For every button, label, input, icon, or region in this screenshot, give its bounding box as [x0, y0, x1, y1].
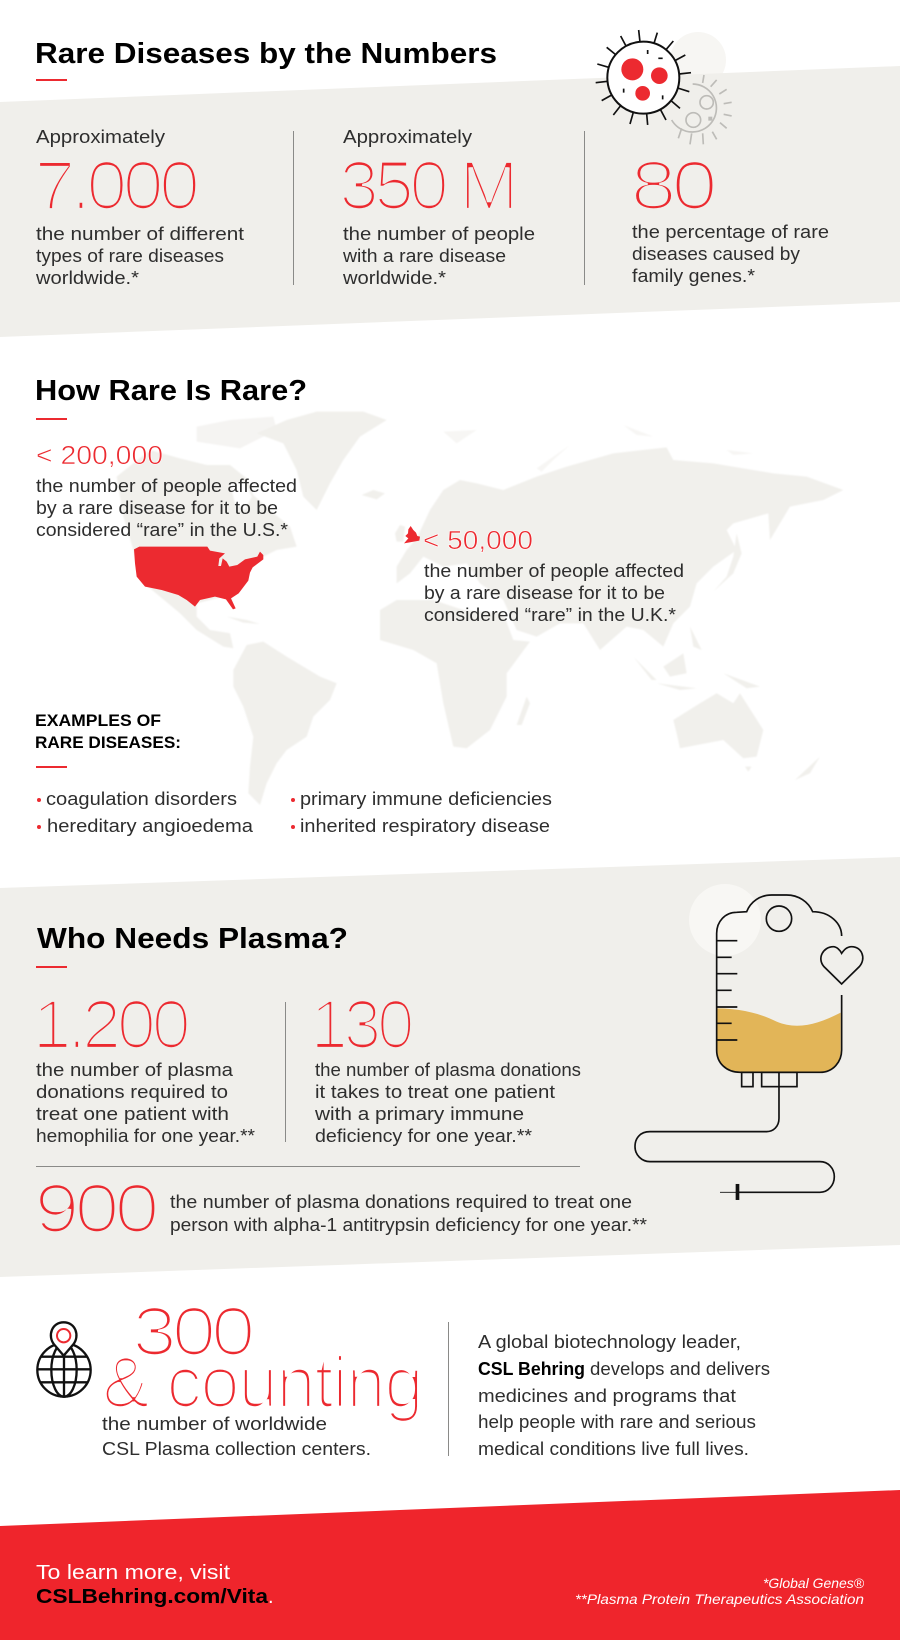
stat: 7,000: the number of different: [36, 223, 244, 244]
panel: collection centers and CSL Behring: [37, 1293, 770, 1459]
text: CSL Behring description: [478, 1331, 770, 1459]
stat: 80: [630, 147, 829, 286]
text: collection centers: [102, 1413, 371, 1459]
text: CSL Behring description: A global biotechnology leader,: [478, 1331, 741, 1352]
list: rare disease examples: [37, 788, 552, 836]
stat: 1,200: the number of plasma: [36, 1059, 234, 1080]
stat: 300 and counting: & counting: [102, 1344, 422, 1423]
heading: Who Needs Plasma?: Who Needs Plasma?: [37, 923, 348, 955]
stat: 900: person with alpha-1 antitrypsin deficiency for one year.**: [170, 1214, 647, 1235]
panel: footer call to action: [0, 1490, 900, 1640]
text: CSL Behring description: CSL Behring: [478, 1358, 585, 1379]
stat: 900: 900: [34, 1170, 157, 1247]
text: sources: *Global Genes®: [763, 1575, 865, 1591]
text: collection centers: the number of worldwide: [102, 1413, 327, 1434]
subheading: examples of rare diseases: [35, 711, 181, 752]
stat: 900: [34, 1170, 647, 1247]
stat: 80: the percentage of rare: [632, 221, 829, 242]
icon: plasma bag with tube: [635, 884, 863, 1200]
callout: UK threshold: < 50,000: [423, 525, 533, 555]
text: CSL Behring description: develops and delivers: [590, 1358, 770, 1379]
grey virus: [672, 75, 732, 144]
heading accent dash: [36, 418, 67, 420]
text: CSL Behring description: help people with rare and serious: [478, 1411, 756, 1432]
stat: 80: diseases caused by: [632, 243, 801, 264]
text: to learn more: .: [268, 1586, 274, 1608]
subheading accent dash: [36, 766, 67, 768]
europe, asia, africa, oceania: [380, 425, 843, 780]
heading accent dash: [36, 966, 67, 968]
stat: 7,000: worldwide.*: [35, 267, 139, 288]
icon: virus cells: [596, 30, 732, 144]
stat: 1,200: [32, 986, 255, 1146]
stat: 7,000: Approximately: [36, 126, 166, 147]
text: sources: **Plasma Protein Therapeutics Association: [575, 1591, 864, 1607]
stat: 1,200: donations required to: [36, 1081, 228, 1102]
panel: who needs plasma: [0, 857, 900, 1277]
map: USA highlighted: [134, 547, 263, 609]
callout: US threshold: by a rare disease for it to be: [36, 497, 278, 518]
heading: How Rare Is Rare?: How Rare Is Rare?: [35, 375, 307, 407]
list: rare disease examples: hereditary angioedema: [47, 815, 254, 836]
grey angled band: [0, 66, 900, 337]
map: UK highlighted: [404, 526, 420, 543]
heading: Rare Diseases by the Numbers: Rare Diseases by the Numbers: [35, 38, 497, 70]
text: CSL Behring description: medicines and programs that: [478, 1385, 736, 1406]
text: to learn more: To learn more, visit: [36, 1561, 230, 1584]
stat: 350 M: 350 M: [339, 147, 514, 224]
stat: 130: with a primary immune: [314, 1103, 524, 1124]
list: rare disease examples: inherited respiratory disease: [300, 815, 550, 836]
subheading: examples of rare diseases: EXAMPLES OF: [35, 711, 161, 730]
icon: heart: [821, 947, 863, 984]
stat: 80: 80: [630, 147, 715, 224]
text: CSL Behring description: medical conditions live full lives.: [478, 1438, 749, 1459]
americas and greenland: [117, 412, 387, 805]
text: collection centers: CSL Plasma collection centers.: [102, 1438, 371, 1459]
world map: [117, 412, 843, 805]
callout: UK threshold: considered “rare” in the U.K.*: [424, 604, 676, 625]
list: rare disease examples: coagulation disorders: [46, 788, 237, 809]
stat: 130: the number of plasma donations: [315, 1059, 581, 1080]
text: to learn more: CSLBehring.com/Vita: [36, 1585, 269, 1608]
subheading: examples of rare diseases: RARE DISEASES:: [35, 733, 181, 752]
panel: rare diseases by the numbers: [0, 30, 900, 337]
callout: US threshold: < 200,000: [36, 440, 163, 470]
stat: 1,200: 1,200: [32, 986, 189, 1063]
panel: how rare is rare: [35, 375, 843, 836]
stat: 350 M: Approximately: [343, 126, 473, 147]
callout: US threshold: [36, 440, 297, 540]
icon: globe with location pin: [37, 1322, 91, 1397]
stat: 130: 130: [310, 986, 413, 1063]
callout: UK threshold: [423, 525, 684, 625]
stat: 130: deficiency for one year.**: [315, 1125, 532, 1146]
stat: 130: [310, 986, 581, 1146]
stat: 7,000: 7,000: [34, 147, 198, 224]
stat: 7,000: types of rare diseases: [36, 245, 224, 266]
stat: 300 and counting: 300: [132, 1293, 253, 1370]
red angled band: [0, 1490, 900, 1640]
grey angled band: [0, 857, 900, 1277]
stat: 7,000: [34, 126, 244, 288]
list: rare disease examples: primary immune deficiencies: [300, 788, 552, 809]
stat: 350 M: the number of people: [343, 223, 535, 244]
stat: 1,200: hemophilia for one year.**: [36, 1125, 255, 1146]
stat: 80: family genes.*: [632, 265, 755, 286]
text: to learn more: [36, 1561, 274, 1608]
pale circle behind virus: [670, 32, 726, 88]
stat: 350 M: with a rare disease: [342, 245, 506, 266]
stat: 130: it takes to treat one patient: [315, 1081, 555, 1102]
callout: US threshold: the number of people affected: [36, 475, 297, 496]
stat: 350 M: [339, 126, 535, 288]
stat: 1,200: treat one patient with: [36, 1103, 229, 1124]
callout: UK threshold: the number of people affected: [424, 560, 684, 581]
text: sources: [575, 1575, 865, 1607]
callout: UK threshold: by a rare disease for it to be: [424, 582, 665, 603]
heading accent dash: [36, 79, 67, 81]
stat: 350 M: worldwide.*: [342, 267, 446, 288]
stat: 900: the number of plasma donations required to treat one: [170, 1191, 632, 1212]
callout: US threshold: considered “rare” in the U.S.*: [36, 519, 288, 540]
black virus: [596, 30, 691, 125]
stat: 300 and counting: [102, 1293, 422, 1423]
plasma fill: [717, 1008, 841, 1072]
